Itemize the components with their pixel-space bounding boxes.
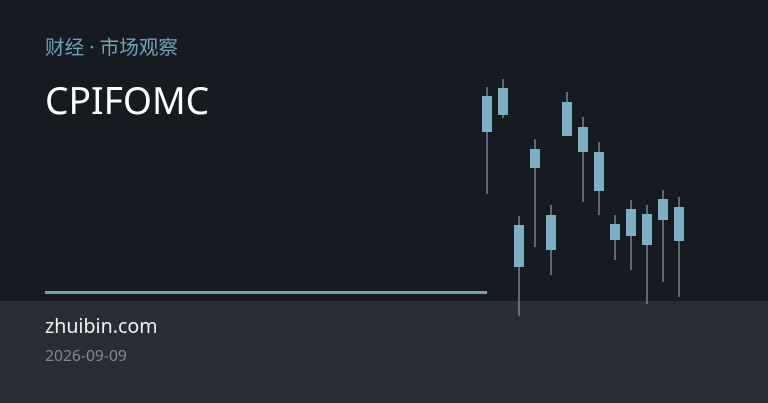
footer band <box>0 301 768 403</box>
site name: zhuibin.com <box>45 312 158 339</box>
title: CPIFOMC <box>45 74 209 125</box>
accent line <box>45 291 487 294</box>
category label: 财经 · 市场观察 <box>45 33 178 60</box>
date: 2026-09-09 <box>45 344 127 366</box>
